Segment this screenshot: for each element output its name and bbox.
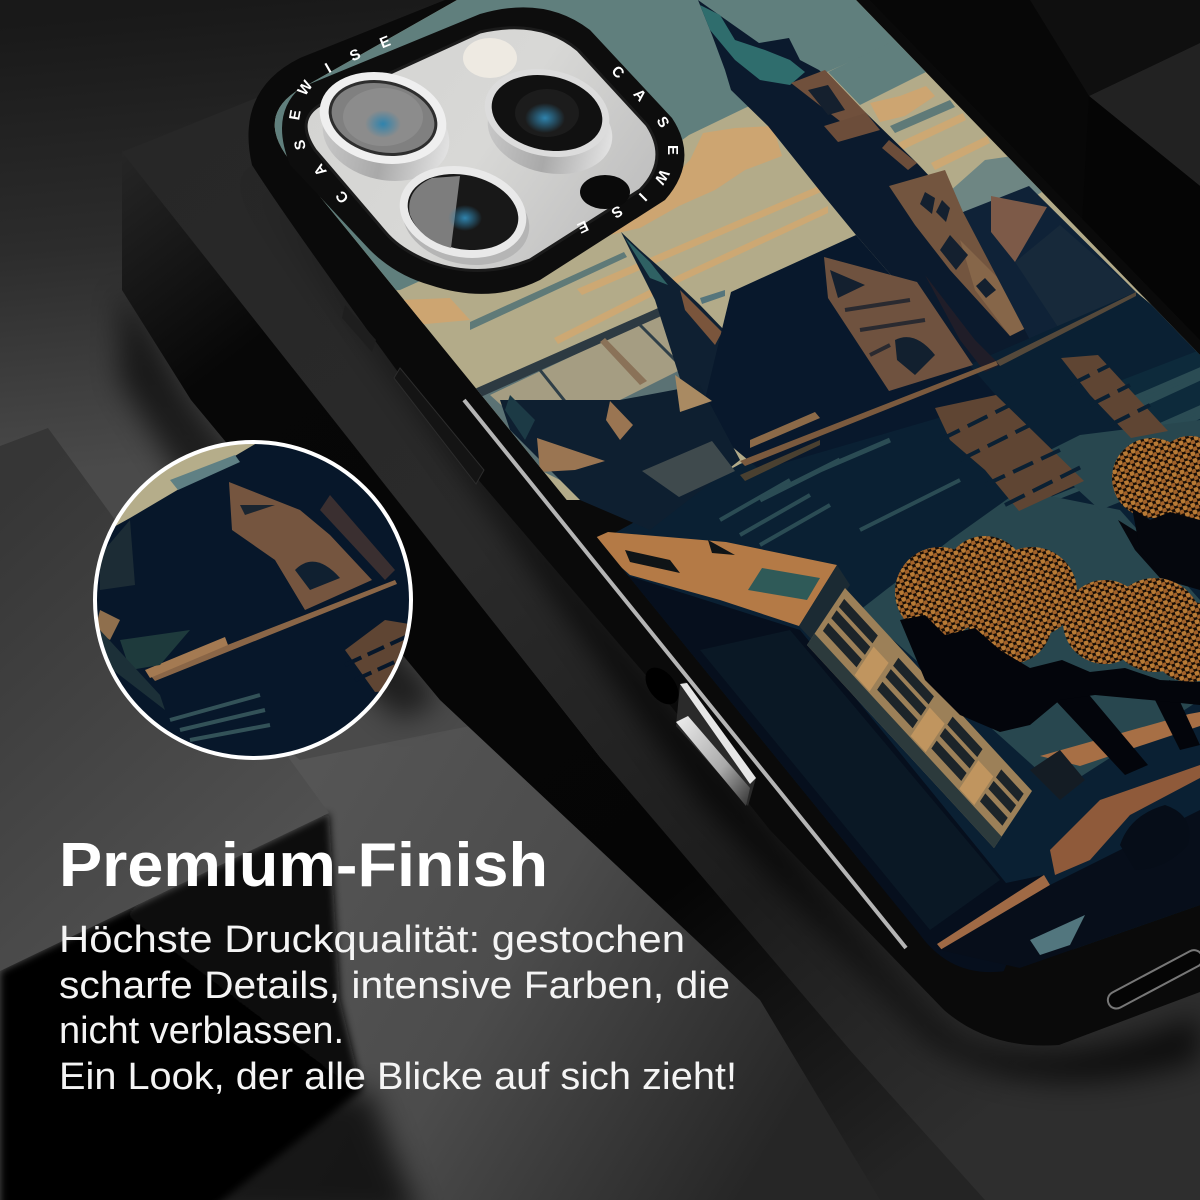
detail magnifier circle xyxy=(90,440,420,760)
brand lettering: I xyxy=(322,60,334,77)
right houses xyxy=(963,186,1136,340)
dark foreground building xyxy=(610,570,1044,980)
sky xyxy=(250,0,1200,500)
side buttons xyxy=(342,305,484,484)
tree: large pair xyxy=(895,536,1200,775)
parked car xyxy=(1120,805,1184,849)
brand lettering: A xyxy=(310,160,330,179)
brand lettering: E xyxy=(575,217,591,236)
silver side button xyxy=(639,661,756,806)
bridge xyxy=(476,308,675,400)
camera bumper ring xyxy=(282,7,684,294)
brand lettering: A xyxy=(630,86,650,105)
water teal patches xyxy=(720,350,1200,790)
reflections xyxy=(935,355,1168,511)
body text xyxy=(59,919,737,1098)
brand lettering: E xyxy=(664,145,681,155)
brand lettering: E xyxy=(377,33,393,52)
brand lettering: C xyxy=(608,63,628,82)
brand lettering: W xyxy=(294,77,317,99)
brand lettering: S xyxy=(291,139,310,151)
sensor hole xyxy=(580,175,630,209)
lens: right xyxy=(476,58,621,185)
phone case body xyxy=(248,0,1200,1046)
flash xyxy=(463,38,517,78)
brand lettering: I xyxy=(635,189,650,204)
water xyxy=(600,292,1200,950)
phone shadow xyxy=(250,170,1200,1081)
waterfront promenade xyxy=(740,292,1136,481)
body text: nicht verblassen. xyxy=(59,1010,344,1052)
distant haze xyxy=(479,352,680,480)
brand lettering: S xyxy=(608,202,625,221)
inset church facade xyxy=(229,482,372,610)
chrome edge highlight xyxy=(464,400,906,948)
charging port xyxy=(1105,947,1200,1011)
clouds xyxy=(610,126,782,235)
brand lettering: S xyxy=(347,46,363,65)
church facade xyxy=(824,257,1000,391)
lens: bottom xyxy=(391,155,538,276)
phone artwork: pixel city xyxy=(250,0,1200,1000)
brand lettering: C xyxy=(332,187,352,206)
lens: left xyxy=(311,61,458,192)
tree: right xyxy=(1112,436,1200,590)
brand lettering xyxy=(286,33,681,236)
main tower xyxy=(698,0,1030,364)
long building with windows xyxy=(807,588,1032,848)
heading: Premium-Finish xyxy=(59,831,548,900)
street xyxy=(937,712,1200,968)
brand lettering: W xyxy=(650,166,672,188)
body text: Ein Look, der alle Blicke auf sich zieht! xyxy=(59,1056,737,1098)
body text: Höchste Druckqualität: gestochen xyxy=(59,919,685,961)
brand lettering: S xyxy=(653,114,672,131)
dark tree underside xyxy=(900,615,1200,732)
small spire xyxy=(621,232,722,396)
camera module xyxy=(282,7,684,294)
body text: scharfe Details, intensive Farben, die xyxy=(59,965,730,1007)
orange roof xyxy=(590,532,850,640)
window rows xyxy=(823,599,1024,826)
lower left houses xyxy=(500,375,740,530)
brand lettering: E xyxy=(286,109,305,121)
camera well xyxy=(306,28,657,271)
dark waterfront building xyxy=(700,235,1000,470)
inset waterfront xyxy=(150,580,397,681)
